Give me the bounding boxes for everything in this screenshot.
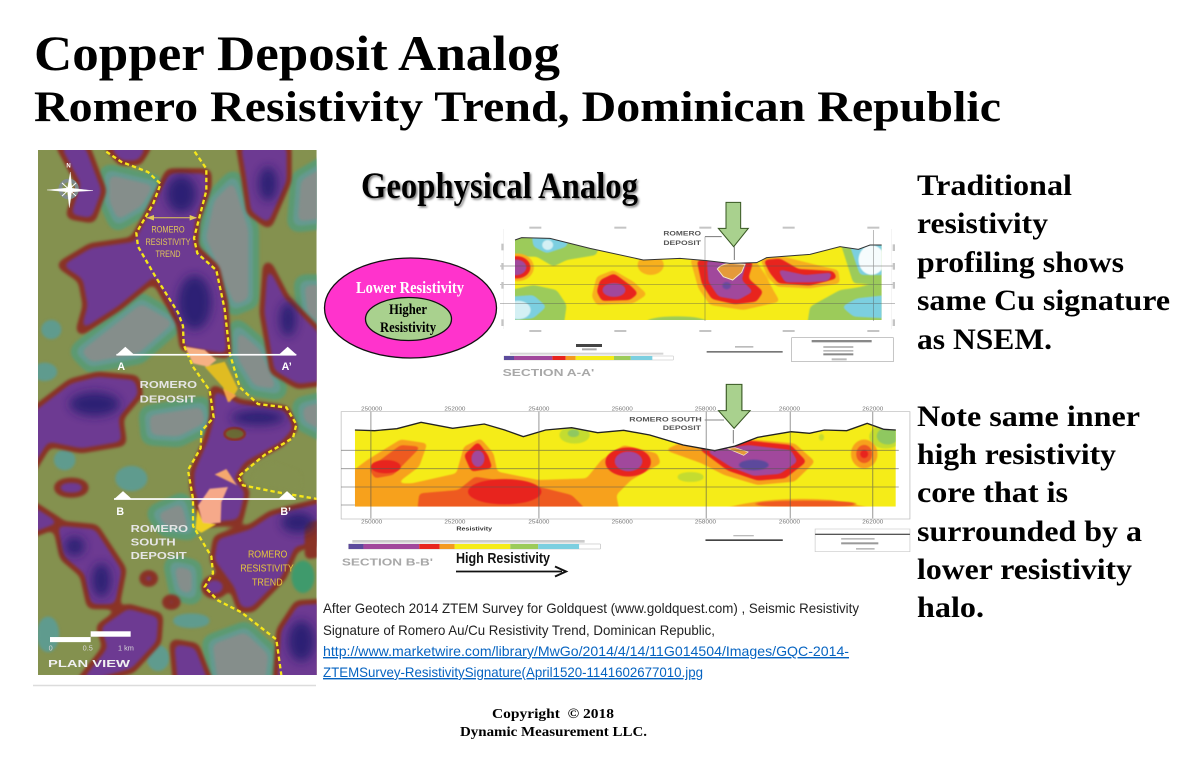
map: lower trend label [240, 549, 294, 589]
text block: traditional resistivity note: resistivity [917, 207, 1048, 240]
map: Romero deposit label: DEPOSIT [140, 394, 197, 405]
section B: deposit label: ROMERO SOUTH [629, 417, 702, 424]
map: upper trend label: RESISTIVITY [145, 236, 191, 247]
section B: axis ticks: 258000 [695, 407, 717, 413]
map: scale bar [49, 631, 134, 653]
map: upper trend label [145, 215, 197, 259]
map: Romero South deposit label [131, 524, 189, 562]
map: lower trend label: TREND [252, 578, 283, 589]
source citation: ZTEMSurvey-ResistivitySignature(April1520-1141602677010.jpg [323, 664, 703, 680]
text block: high resistivity core note: halo. [917, 591, 984, 624]
section A: color legend [504, 344, 673, 360]
source citation [323, 600, 859, 680]
section B: color legend: Resistivity [456, 527, 493, 533]
panel: plan view map [31, 147, 325, 682]
text block: high resistivity core note: surrounded by a [917, 515, 1142, 548]
section B: axis ticks: 254000 [528, 520, 550, 525]
section B: caption: SECTION B-B' [342, 557, 433, 568]
map: section line A: A’ [282, 361, 292, 373]
map: upper trend label: ROMERO [151, 223, 185, 234]
diagram: resistivity ellipses: Resistivity [380, 320, 436, 336]
section A: scale and title block [707, 338, 893, 362]
section A: green arrow [718, 202, 748, 247]
source citation: Signature of Romero Au/Cu Resistivity Trend, Dominican Republic, [323, 622, 715, 638]
map: deposit footprints [185, 346, 238, 533]
section A: deposit label: ROMERO [663, 231, 701, 238]
map: section line B: B [116, 506, 124, 518]
map: trend outline dashes [106, 152, 317, 675]
text block: traditional resistivity note: Traditional [917, 169, 1072, 202]
map: section line B: B’ [280, 506, 291, 518]
source citation: http://www.marketwire.com/library/MwGo/2014/4/14/11G014504/Images/GQC-2014- [323, 643, 849, 659]
section A: resistivity fill [515, 238, 882, 320]
title: Romero Resistivity Trend, Dominican Republic [34, 84, 1001, 131]
section B: axis ticks: 260000 [779, 520, 801, 525]
chart: section A-A' [500, 202, 895, 379]
copyright: Copyright © 2018 [492, 707, 614, 722]
section B: axis ticks: 258000 [695, 520, 717, 525]
map: deep blue centers [65, 167, 315, 661]
text block: traditional resistivity note [917, 169, 1170, 356]
text block: traditional resistivity note: profiling shows [917, 246, 1124, 279]
map: lower trend label: ROMERO [248, 549, 287, 560]
map: lower trend label: RESISTIVITY [240, 563, 294, 574]
section B: axis ticks: 254000 [528, 407, 550, 413]
diagram: resistivity ellipses [324, 258, 496, 358]
section B: axis ticks: 262000 [862, 520, 884, 525]
chart: section B-B' [341, 384, 910, 568]
text block: high resistivity core note: core that is [917, 476, 1068, 509]
map: Romero South deposit label: DEPOSIT [131, 551, 187, 562]
section B: axis ticks [361, 407, 884, 525]
section B: scale and title block [705, 529, 910, 552]
section B: axis ticks: 262000 [862, 407, 884, 413]
section A: terrain and grid [500, 230, 895, 321]
text block: traditional resistivity note: as NSEM. [917, 323, 1052, 356]
title: Copper Deposit Analog [34, 25, 560, 81]
section B: deposit label [629, 417, 702, 432]
map: Romero South deposit label: SOUTH [131, 538, 176, 549]
section A: deposit label [663, 231, 701, 247]
map: Romero South deposit label: ROMERO [131, 524, 189, 535]
section B: resistivity fill [354, 423, 896, 507]
section A: axis ticks [501, 227, 895, 332]
section B: terrain and grid [341, 412, 899, 518]
section B: axis ticks: 252000 [444, 520, 466, 525]
section A: caption: SECTION A-A' [503, 368, 594, 379]
title [34, 25, 1001, 131]
map: section line B [114, 491, 296, 518]
section B: deposit label: DEPOSIT [663, 425, 702, 432]
map: compass [47, 163, 93, 208]
section B: axis ticks: 256000 [612, 407, 633, 413]
high resistivity arrow: High Resistivity [456, 550, 551, 567]
copyright [460, 707, 647, 740]
text block: high resistivity core note: lower resistivity [917, 553, 1132, 586]
text block: high resistivity core note: Note same inner [917, 400, 1140, 433]
section B: axis ticks: 260000 [779, 407, 801, 413]
map: plan view label: PLAN VIEW [48, 659, 131, 670]
map: compass: N [66, 163, 71, 169]
diagram: resistivity ellipses: Lower Resistivity [356, 278, 464, 297]
section B: color legend [349, 527, 600, 549]
map: upper trend label: TREND [155, 248, 181, 259]
text block: high resistivity core note: high resistivity [917, 438, 1116, 471]
section B: axis ticks: 250000 [361, 520, 383, 525]
section B: axis ticks: 256000 [612, 520, 633, 525]
copyright: Dynamic Measurement LLC. [460, 725, 647, 740]
section B: axis ticks: 250000 [361, 407, 383, 413]
map: grey resistive hills [31, 167, 325, 682]
map: scale bar: 0.5 [83, 644, 93, 653]
map: Romero deposit label: ROMERO [140, 380, 197, 391]
heading: geophysical analog: Geophysical Analog [361, 166, 638, 207]
map: section line A: A [117, 361, 125, 373]
high resistivity arrow [456, 550, 566, 576]
map: low resistivity purple zones [31, 147, 325, 682]
section A: deposit label: DEPOSIT [663, 240, 701, 247]
map: section line A [116, 347, 297, 373]
map: scale bar: 0 [49, 644, 53, 653]
text block: high resistivity core note [917, 400, 1142, 624]
text block: traditional resistivity note: same Cu signature [917, 284, 1170, 317]
map: Romero deposit label [140, 380, 197, 405]
section B: green arrow [718, 384, 750, 428]
map: scale bar: 1 km [118, 644, 134, 653]
section B: axis ticks: 252000 [444, 407, 466, 413]
source citation: After Geotech 2014 ZTEM Survey for Goldquest (www.goldquest.com) , Seismic Resistivity [323, 600, 859, 616]
diagram: resistivity ellipses: Higher [389, 302, 427, 318]
